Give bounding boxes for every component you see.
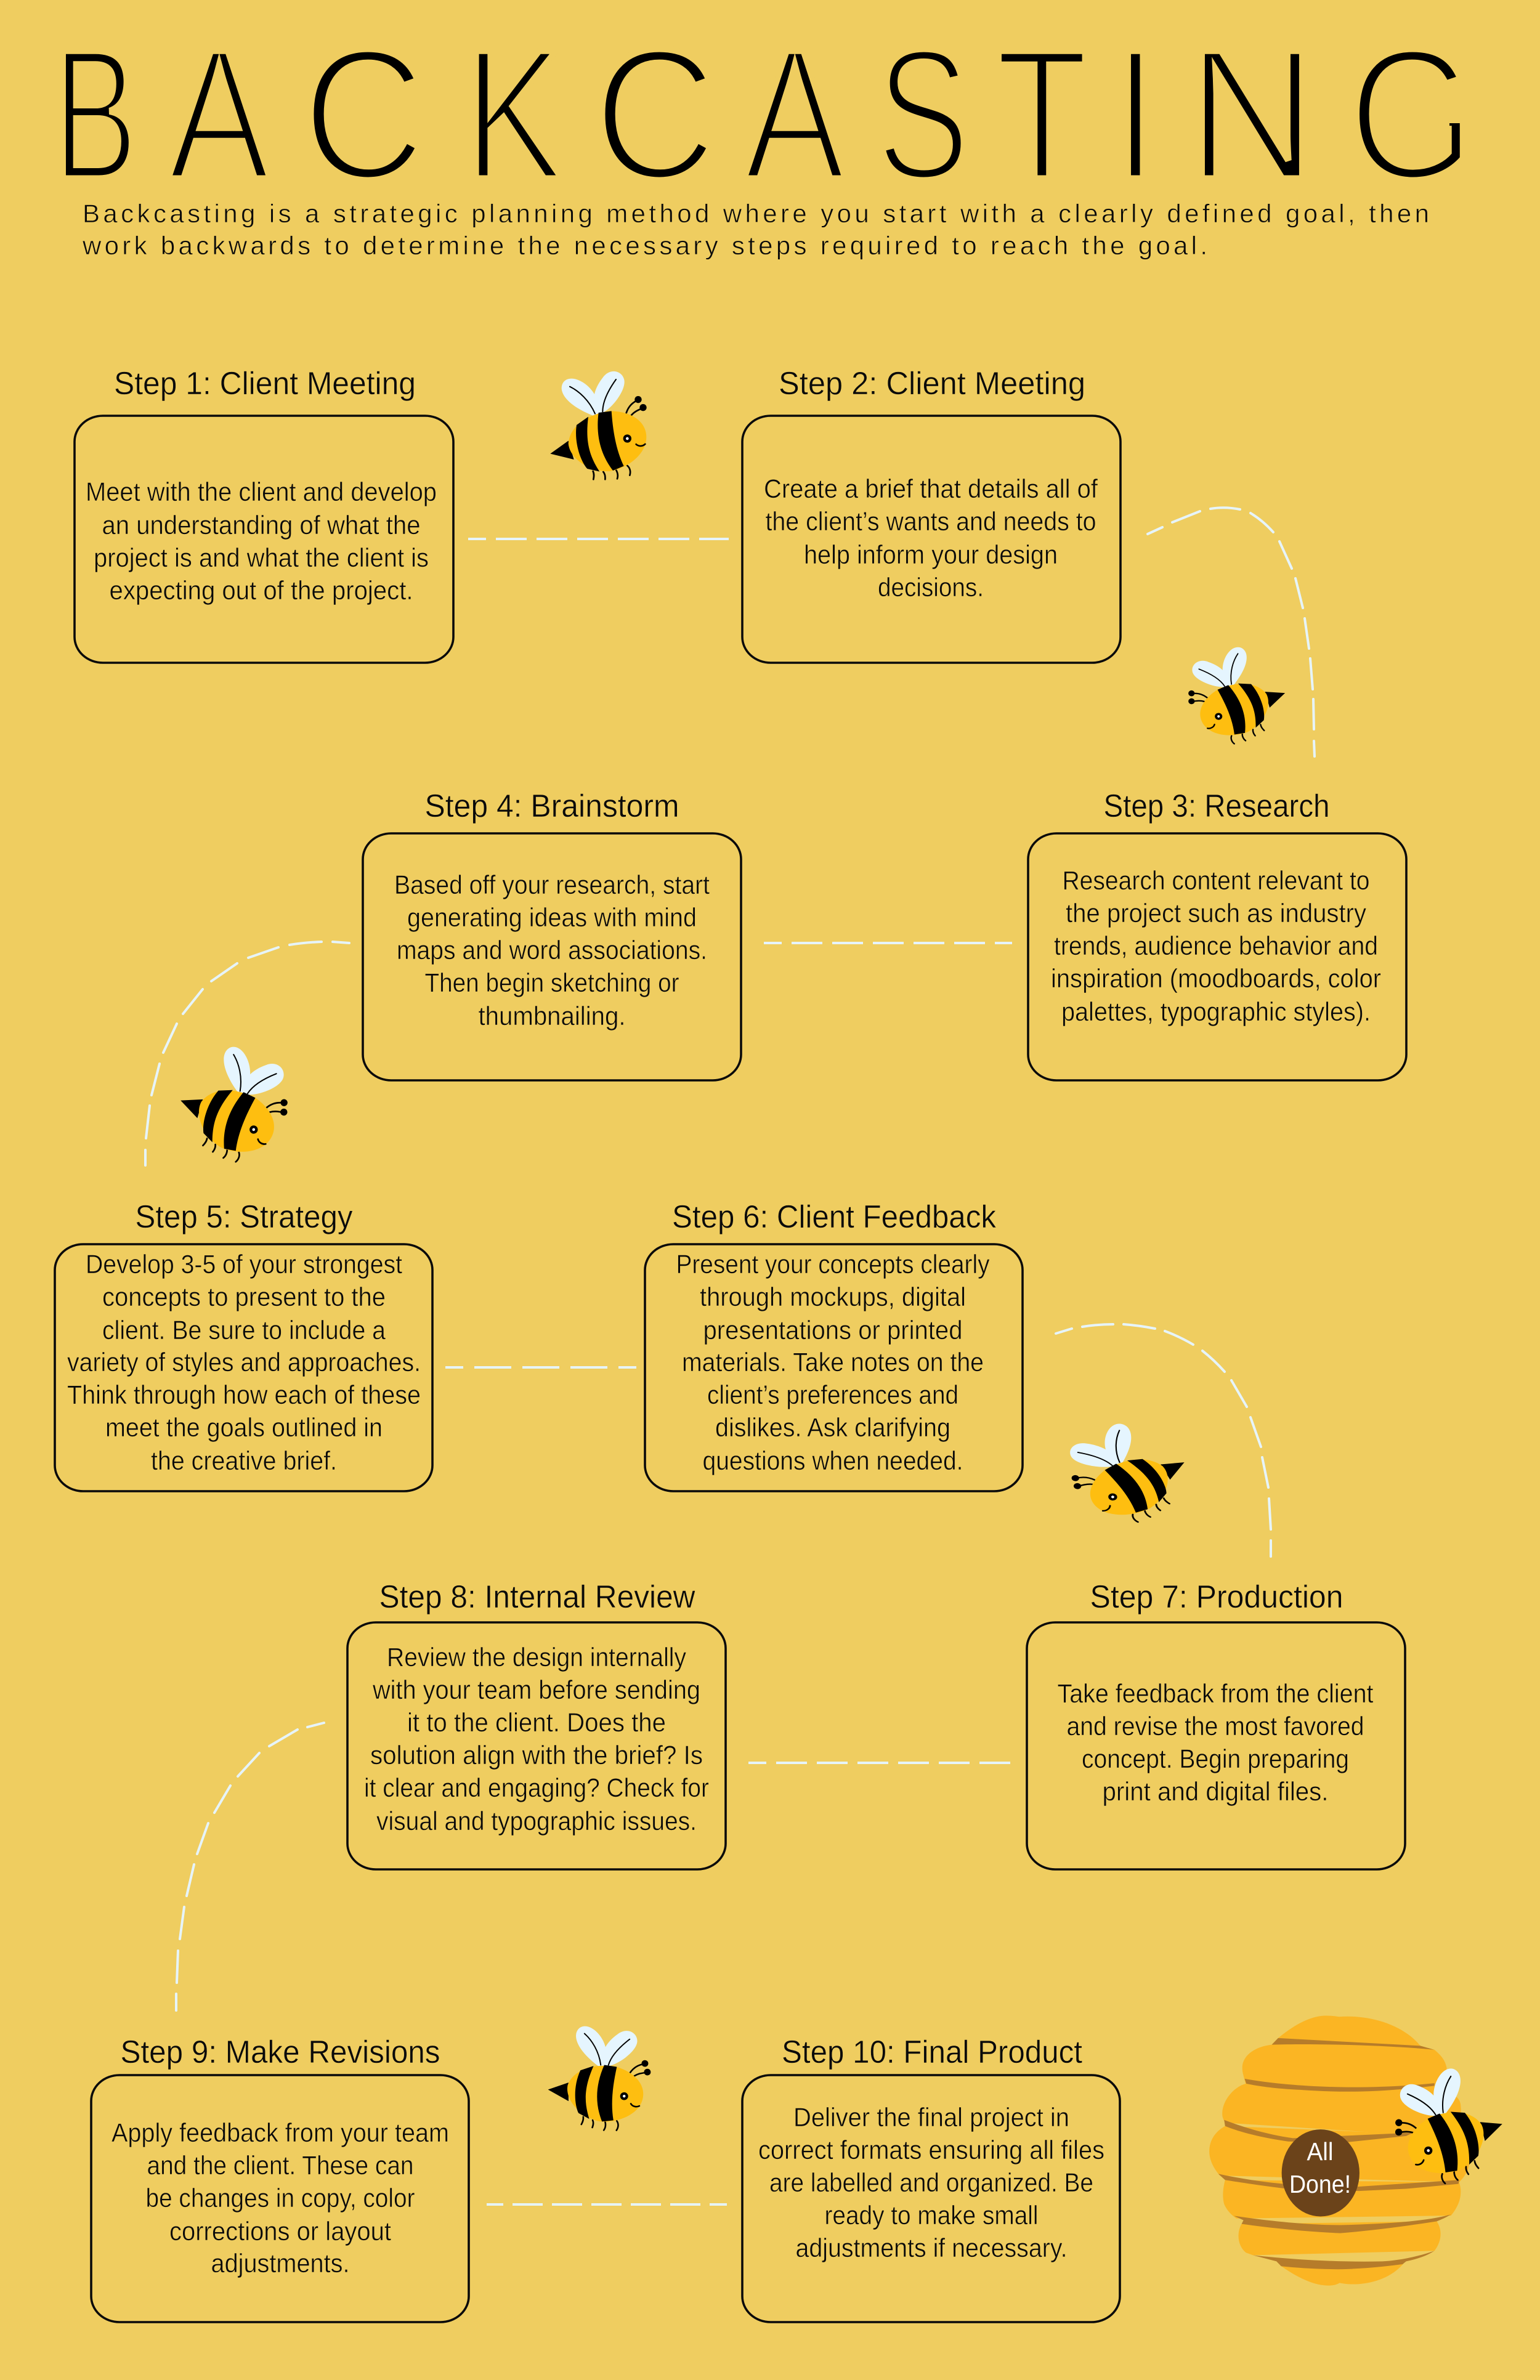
card: step 2 (742, 416, 1121, 663)
text: step 3: trends, audience behavior and (1054, 931, 1378, 961)
text: step 8: it to the client. Does the (407, 1708, 666, 1738)
text: step 5: meet the goals outlined in (105, 1413, 383, 1443)
arrow: curve step 6 to 7 (1056, 1324, 1271, 1556)
arrow: curve step 8 to 9 (176, 1723, 324, 2010)
text: step 4: thumbnailing. (478, 1002, 626, 1031)
text: step 3: the project such as industry (1066, 899, 1366, 928)
text: step 1: project is and what the client is (94, 543, 429, 573)
text: step 6: through mockups, digital (700, 1282, 966, 1312)
text: step 5: concepts to present to the (102, 1282, 386, 1312)
card: step 9 (91, 2075, 469, 2322)
card: step 3 (1028, 833, 1406, 1080)
text: step 10 (758, 2103, 1104, 2263)
title: B (53, 10, 137, 218)
heading: step 5: Step 5: Strategy (136, 1199, 352, 1235)
text: step 2: decisions. (878, 573, 984, 602)
text: step 10: Deliver the final project in (793, 2103, 1069, 2132)
text: step 3: Research content relevant to (1062, 866, 1370, 896)
text: all done: Done! (1289, 2170, 1351, 2198)
panel: step 7 (1027, 1579, 1405, 1869)
icon: bee 6 (1377, 2053, 1515, 2196)
text: step 5: Think through how each of these (67, 1380, 421, 1410)
panel: step 10 (742, 2034, 1120, 2322)
text: step 9: be changes in copy, color (145, 2184, 415, 2213)
heading: step 9: Step 9: Make Revisions (121, 2034, 440, 2070)
text: step 9: adjustments. (211, 2249, 350, 2278)
text: step 1 (86, 477, 437, 605)
arrow: step 3 to 4 (764, 942, 1012, 944)
panel: step 1 (75, 366, 453, 663)
title: I (1114, 11, 1157, 219)
arrow: curve step 4 to 5 (145, 942, 349, 1165)
text: step 3 (1051, 866, 1381, 1027)
heading: step 4: Step 4: Brainstorm (425, 788, 679, 824)
text: step 8: with your team before sending (372, 1675, 700, 1705)
intro text: work backwards to determine the necessary steps required to reach the goal. (82, 231, 1207, 260)
panel: step 3 (1028, 788, 1406, 1080)
text: step 1: an understanding of what the (102, 511, 420, 540)
text: step 10: correct formats ensuring all files (758, 2135, 1104, 2165)
text: step 4: Based off your research, start (394, 870, 710, 900)
title: A (744, 11, 846, 219)
heading: step 10: Step 10: Final Product (782, 2034, 1083, 2070)
icon: bee 2 (1172, 634, 1297, 754)
text: step 8: it clear and engaging? Check for (364, 1773, 709, 1803)
heading: step 6: Step 6: Client Feedback (672, 1199, 997, 1235)
title: G (1348, 10, 1475, 219)
text: step 2: Create a brief that details all of (764, 474, 1098, 504)
icon: bee 4 (1048, 1409, 1203, 1534)
text: step 5: client. Be sure to include a (102, 1316, 386, 1345)
card: step 8 (347, 1622, 726, 1869)
intro text (82, 199, 1429, 260)
text: step 6: Present your concepts clearly (676, 1250, 990, 1279)
heading: step 3: Step 3: Research (1104, 788, 1329, 824)
text: step 6: dislikes. Ask clarifying (715, 1413, 950, 1443)
panel: step 8 (347, 1579, 726, 1869)
icon: beehive (1209, 2015, 1469, 2286)
heading: step 1: Step 1: Client Meeting (114, 366, 416, 402)
text: step 7: print and digital files. (1103, 1777, 1328, 1807)
text: step 3: inspiration (moodboards, color (1051, 964, 1381, 994)
card: step 4 (363, 833, 741, 1080)
text: step 1: expecting out of the project. (110, 576, 413, 605)
text: step 4: maps and word associations. (397, 936, 707, 965)
text: step 5: the creative brief. (151, 1446, 337, 1476)
text: step 6 (676, 1250, 990, 1476)
text: all done: All (1307, 2137, 1333, 2166)
text: step 10: are labelled and organized. Be (769, 2168, 1093, 2198)
text: step 6: questions when needed. (702, 1446, 963, 1476)
panel: step 9 (91, 2034, 469, 2322)
heading: step 7: Step 7: Production (1090, 1579, 1343, 1615)
text: step 8 (364, 1643, 709, 1836)
text: step 7: Take feedback from the client (1057, 1679, 1374, 1709)
text: step 8: visual and typographic issues. (376, 1807, 697, 1836)
title: C (593, 11, 716, 219)
title: T (995, 10, 1088, 219)
card: step 6 (645, 1244, 1023, 1491)
text: step 10: adjustments if necessary. (796, 2233, 1067, 2263)
panel: step 2 (742, 366, 1121, 663)
text: step 4: generating ideas with mind (407, 903, 697, 933)
text: step 8: Review the design internally (387, 1643, 686, 1672)
card: step 10 (742, 2075, 1120, 2322)
title (53, 10, 1475, 219)
text: step 10: ready to make small (824, 2201, 1039, 2230)
title: K (464, 10, 564, 218)
arrow: step 1 to 2 (468, 538, 729, 540)
text: step 4 (394, 870, 710, 1031)
text: step 7: and revise the most favored (1067, 1712, 1364, 1741)
text: step 6: materials. Take notes on the (682, 1348, 984, 1377)
text: step 5 (67, 1250, 421, 1476)
card: step 5 (55, 1244, 432, 1491)
text: step 2: the client’s wants and needs to (765, 507, 1096, 536)
text: step 9: and the client. These can (147, 2151, 414, 2180)
icon: bee 1 (550, 371, 647, 479)
title: A (168, 10, 270, 219)
text: step 1: Meet with the client and develop (86, 477, 437, 507)
text: step 7: concept. Begin preparing (1082, 1744, 1349, 1774)
title: S (877, 10, 970, 218)
text: step 9: corrections or layout (169, 2217, 391, 2246)
text: step 5: variety of styles and approaches. (67, 1348, 421, 1377)
card: step 7 (1027, 1622, 1405, 1869)
text: step 9: Apply feedback from your team (111, 2118, 449, 2148)
text: step 5: Develop 3-5 of your strongest (86, 1250, 402, 1279)
title: N (1187, 11, 1317, 219)
heading: step 8: Step 8: Internal Review (379, 1579, 695, 1615)
panel: step 4 (363, 788, 741, 1080)
arrow: step 5 to 6 (445, 1366, 636, 1369)
text: step 4: Then begin sketching or (425, 968, 679, 998)
intro text: Backcasting is a strategic planning method where you start with a clearly defined goal, then (83, 199, 1429, 228)
text: step 2 (764, 474, 1098, 602)
heading: step 2: Step 2: Client Meeting (779, 366, 1085, 402)
card: step 1 (75, 416, 453, 663)
text: step 8: solution align with the brief? Is (370, 1741, 703, 1770)
text: step 6: presentations or printed (703, 1316, 962, 1345)
panel: step 5 (55, 1199, 432, 1491)
arrow: step 7 to 8 (748, 1762, 1011, 1764)
arrow: step 9 to 10 (487, 2203, 727, 2206)
title: C (302, 11, 425, 219)
text: step 3: palettes, typographic styles). (1061, 997, 1371, 1027)
text: all done (1289, 2137, 1351, 2198)
text: step 2: help inform your design (804, 540, 1058, 570)
text: step 7 (1057, 1679, 1374, 1807)
text: step 6: client’s preferences and (707, 1380, 958, 1410)
arrow: curve step 2 to 3 (1148, 508, 1315, 756)
icon: bee 5 (541, 2015, 660, 2139)
icon: bee 3 (167, 1031, 307, 1175)
panel: step 6 (645, 1199, 1023, 1491)
text: step 9 (111, 2118, 449, 2278)
